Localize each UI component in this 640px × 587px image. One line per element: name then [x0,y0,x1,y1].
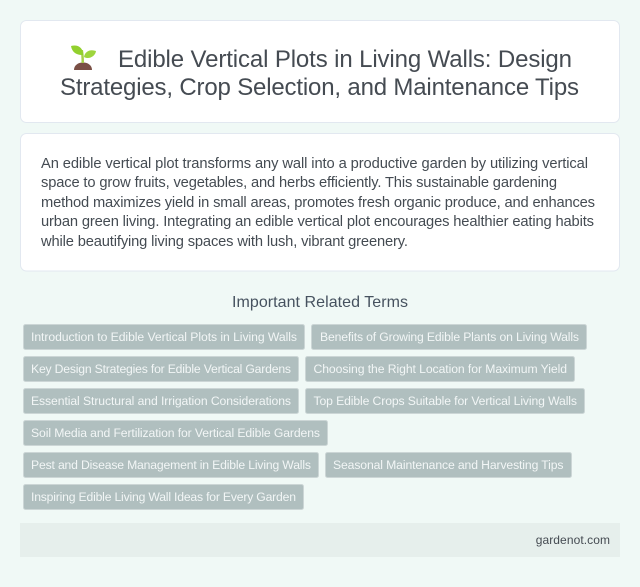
chip: benefits [312,324,586,350]
description text: space to grow fruits, vegetables, and herbs efficiently. This sustainable gardening [41,175,557,191]
chip: seasonal [326,452,572,478]
title line 1: Edible Vertical Plots in Living Walls: Design [118,46,572,73]
chip: benefits: Benefits of Growing Edible Plants on Living Walls [320,330,579,344]
chip: introduction [24,324,304,350]
chip: location: Choosing the Right Location for Maximum Yield [314,362,567,376]
chip: structural: Essential Structural and Irrigation Considerations [31,394,291,408]
chip: pest [24,452,318,478]
chip: seasonal: Seasonal Maintenance and Harvesting Tips [333,458,564,472]
chip: top crops [306,388,584,414]
chip: introduction: Introduction to Edible Vertical Plots in Living Walls [31,330,297,344]
chip: location [306,356,574,382]
chip: structural [24,388,298,414]
panel: description [20,134,620,271]
chip: soil media: Soil Media and Fertilization for Vertical Edible Gardens [31,426,320,440]
chip: key design: Key Design Strategies for Edible Vertical Gardens [31,362,291,376]
description text: An edible vertical plot transforms any wall into a productive garden by utilizing vertical [41,156,588,172]
heading: important related terms: Important Related Terms [232,294,408,311]
related terms chips [24,324,586,510]
chip: inspiring [24,484,304,510]
description text: while beautifying living spaces with lush, vibrant greenery. [40,234,408,250]
chip: key design [24,356,298,382]
title line 2: Strategies, Crop Selection, and Maintenance Tips [60,74,579,101]
chip: top crops: Top Edible Crops Suitable for Vertical Living Walls [314,394,577,408]
chip: pest: Pest and Disease Management in Edible Living Walls [31,458,311,472]
icon: seedling [71,45,96,70]
description text: method maximizes yield in small areas, promotes fresh organic produce, and enhances [41,195,595,211]
footer source text: gardenot.com [536,533,610,547]
description text [40,156,595,250]
panel: title card [20,20,620,122]
chip: inspiring: Inspiring Edible Living Wall Ideas for Every Garden [31,490,296,504]
description text: urban green living. Integrating an edible vertical plot encourages healthier eating habits [41,214,594,230]
chip: soil media [24,420,328,446]
footer [20,523,620,557]
